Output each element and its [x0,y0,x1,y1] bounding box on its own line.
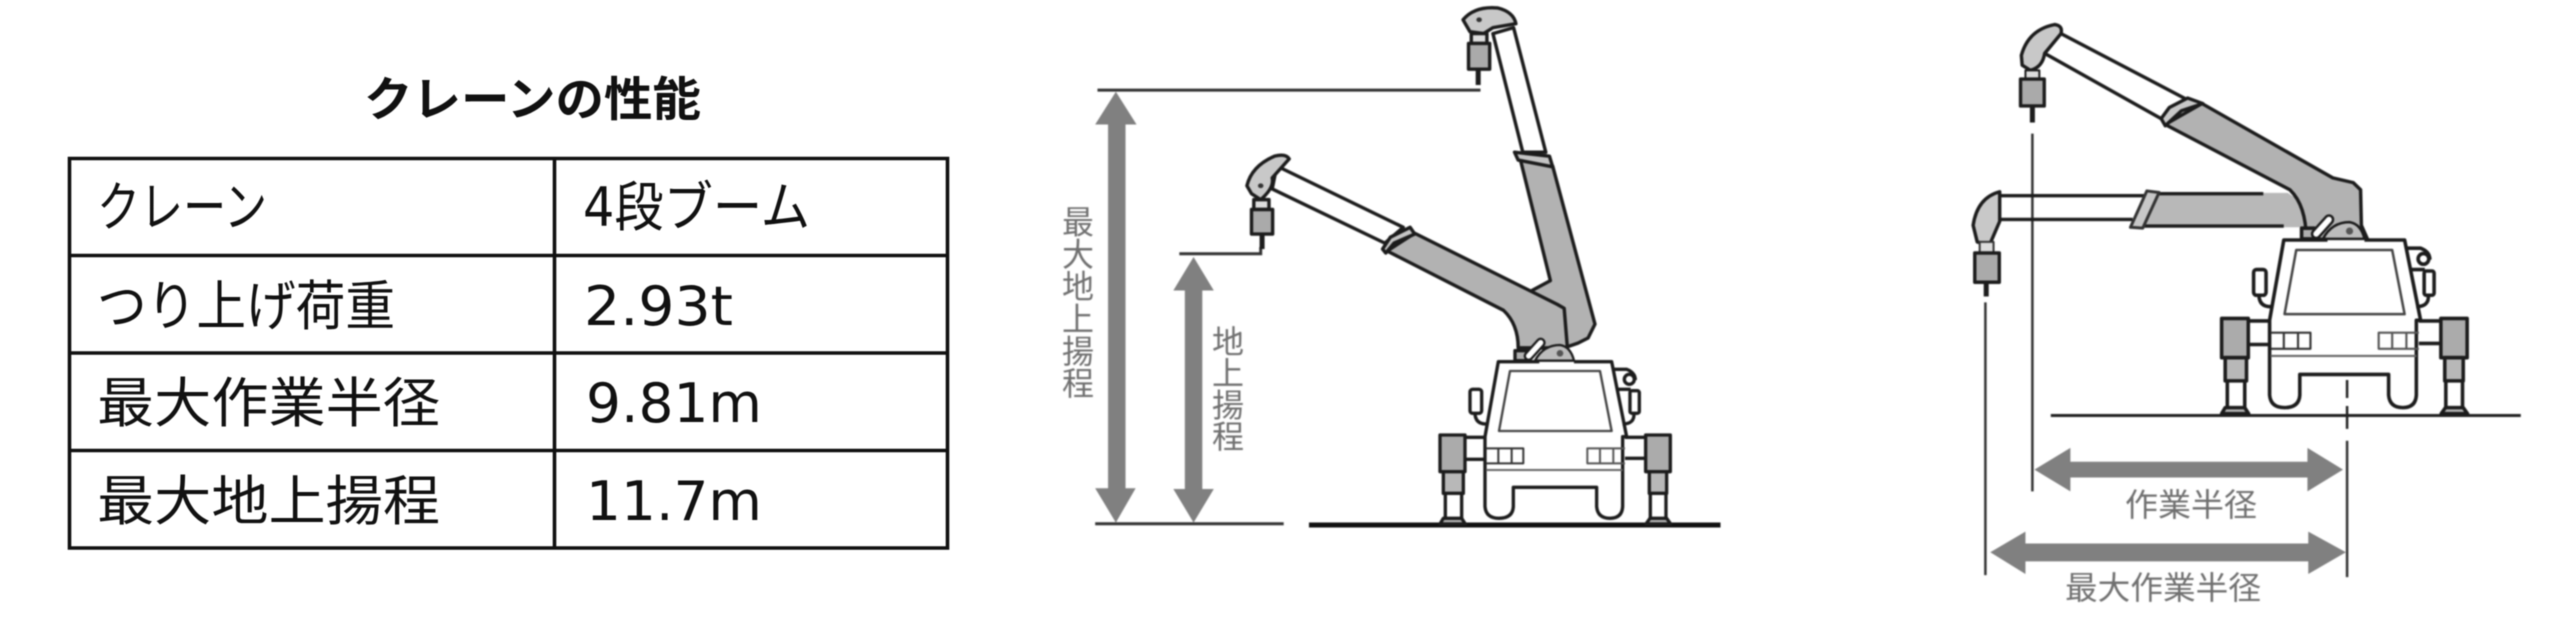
raised boom [1463,8,1595,348]
row: lifting load [97,275,733,338]
row: maximum working radius [97,372,762,435]
title: クレーンの性能 [364,73,701,126]
crane illustration and radius arrows [1973,25,2521,577]
row: crane type [97,176,810,239]
truck: lifting height crane [1440,343,1671,524]
row: maximum lifting height: 最大地上揚程 [97,470,440,533]
diagram: working radius crane [1973,25,2521,606]
row: lifting load: つり上げ荷重 [97,275,395,338]
ground line [2051,414,2521,417]
row: crane type: 4段ブーム [583,176,810,239]
label: maximum working radius: 最大作業半径 [2065,570,2261,606]
horizontal boom [1973,191,2306,296]
arrow: lifting height [1173,257,1214,523]
arrow: maximum working radius [1990,532,2346,574]
row: maximum lifting height [97,470,762,533]
table grid [70,158,948,548]
arrow: working radius [2034,448,2343,491]
height reference lines [1095,90,1480,524]
diagram: lifting height crane [1058,8,1721,525]
row: crane type: クレーン [97,176,267,239]
row: maximum lifting height: 11.7m [586,470,762,533]
label: maximum lifting height: 最大地上揚程 [1058,205,1094,399]
lowered boom and turret [1247,155,1567,348]
ground line [1309,522,1721,527]
truck: working radius crane [2222,220,2468,414]
radius reference lines [1985,134,2347,577]
row: lifting load: 2.93t [584,275,733,338]
panel: crane performance table [70,158,948,548]
label: working radius: 作業半径 [2125,487,2257,523]
label: lifting height: 地上揚程 [1208,325,1244,452]
crane illustration and height arrows [1095,8,1721,525]
arrow: maximum lifting height [1095,92,1137,523]
raised boom and turret [2021,25,2368,239]
row: maximum working radius: 9.81m [586,372,762,435]
row: maximum working radius: 最大作業半径 [97,372,440,435]
centre line [2346,340,2348,429]
